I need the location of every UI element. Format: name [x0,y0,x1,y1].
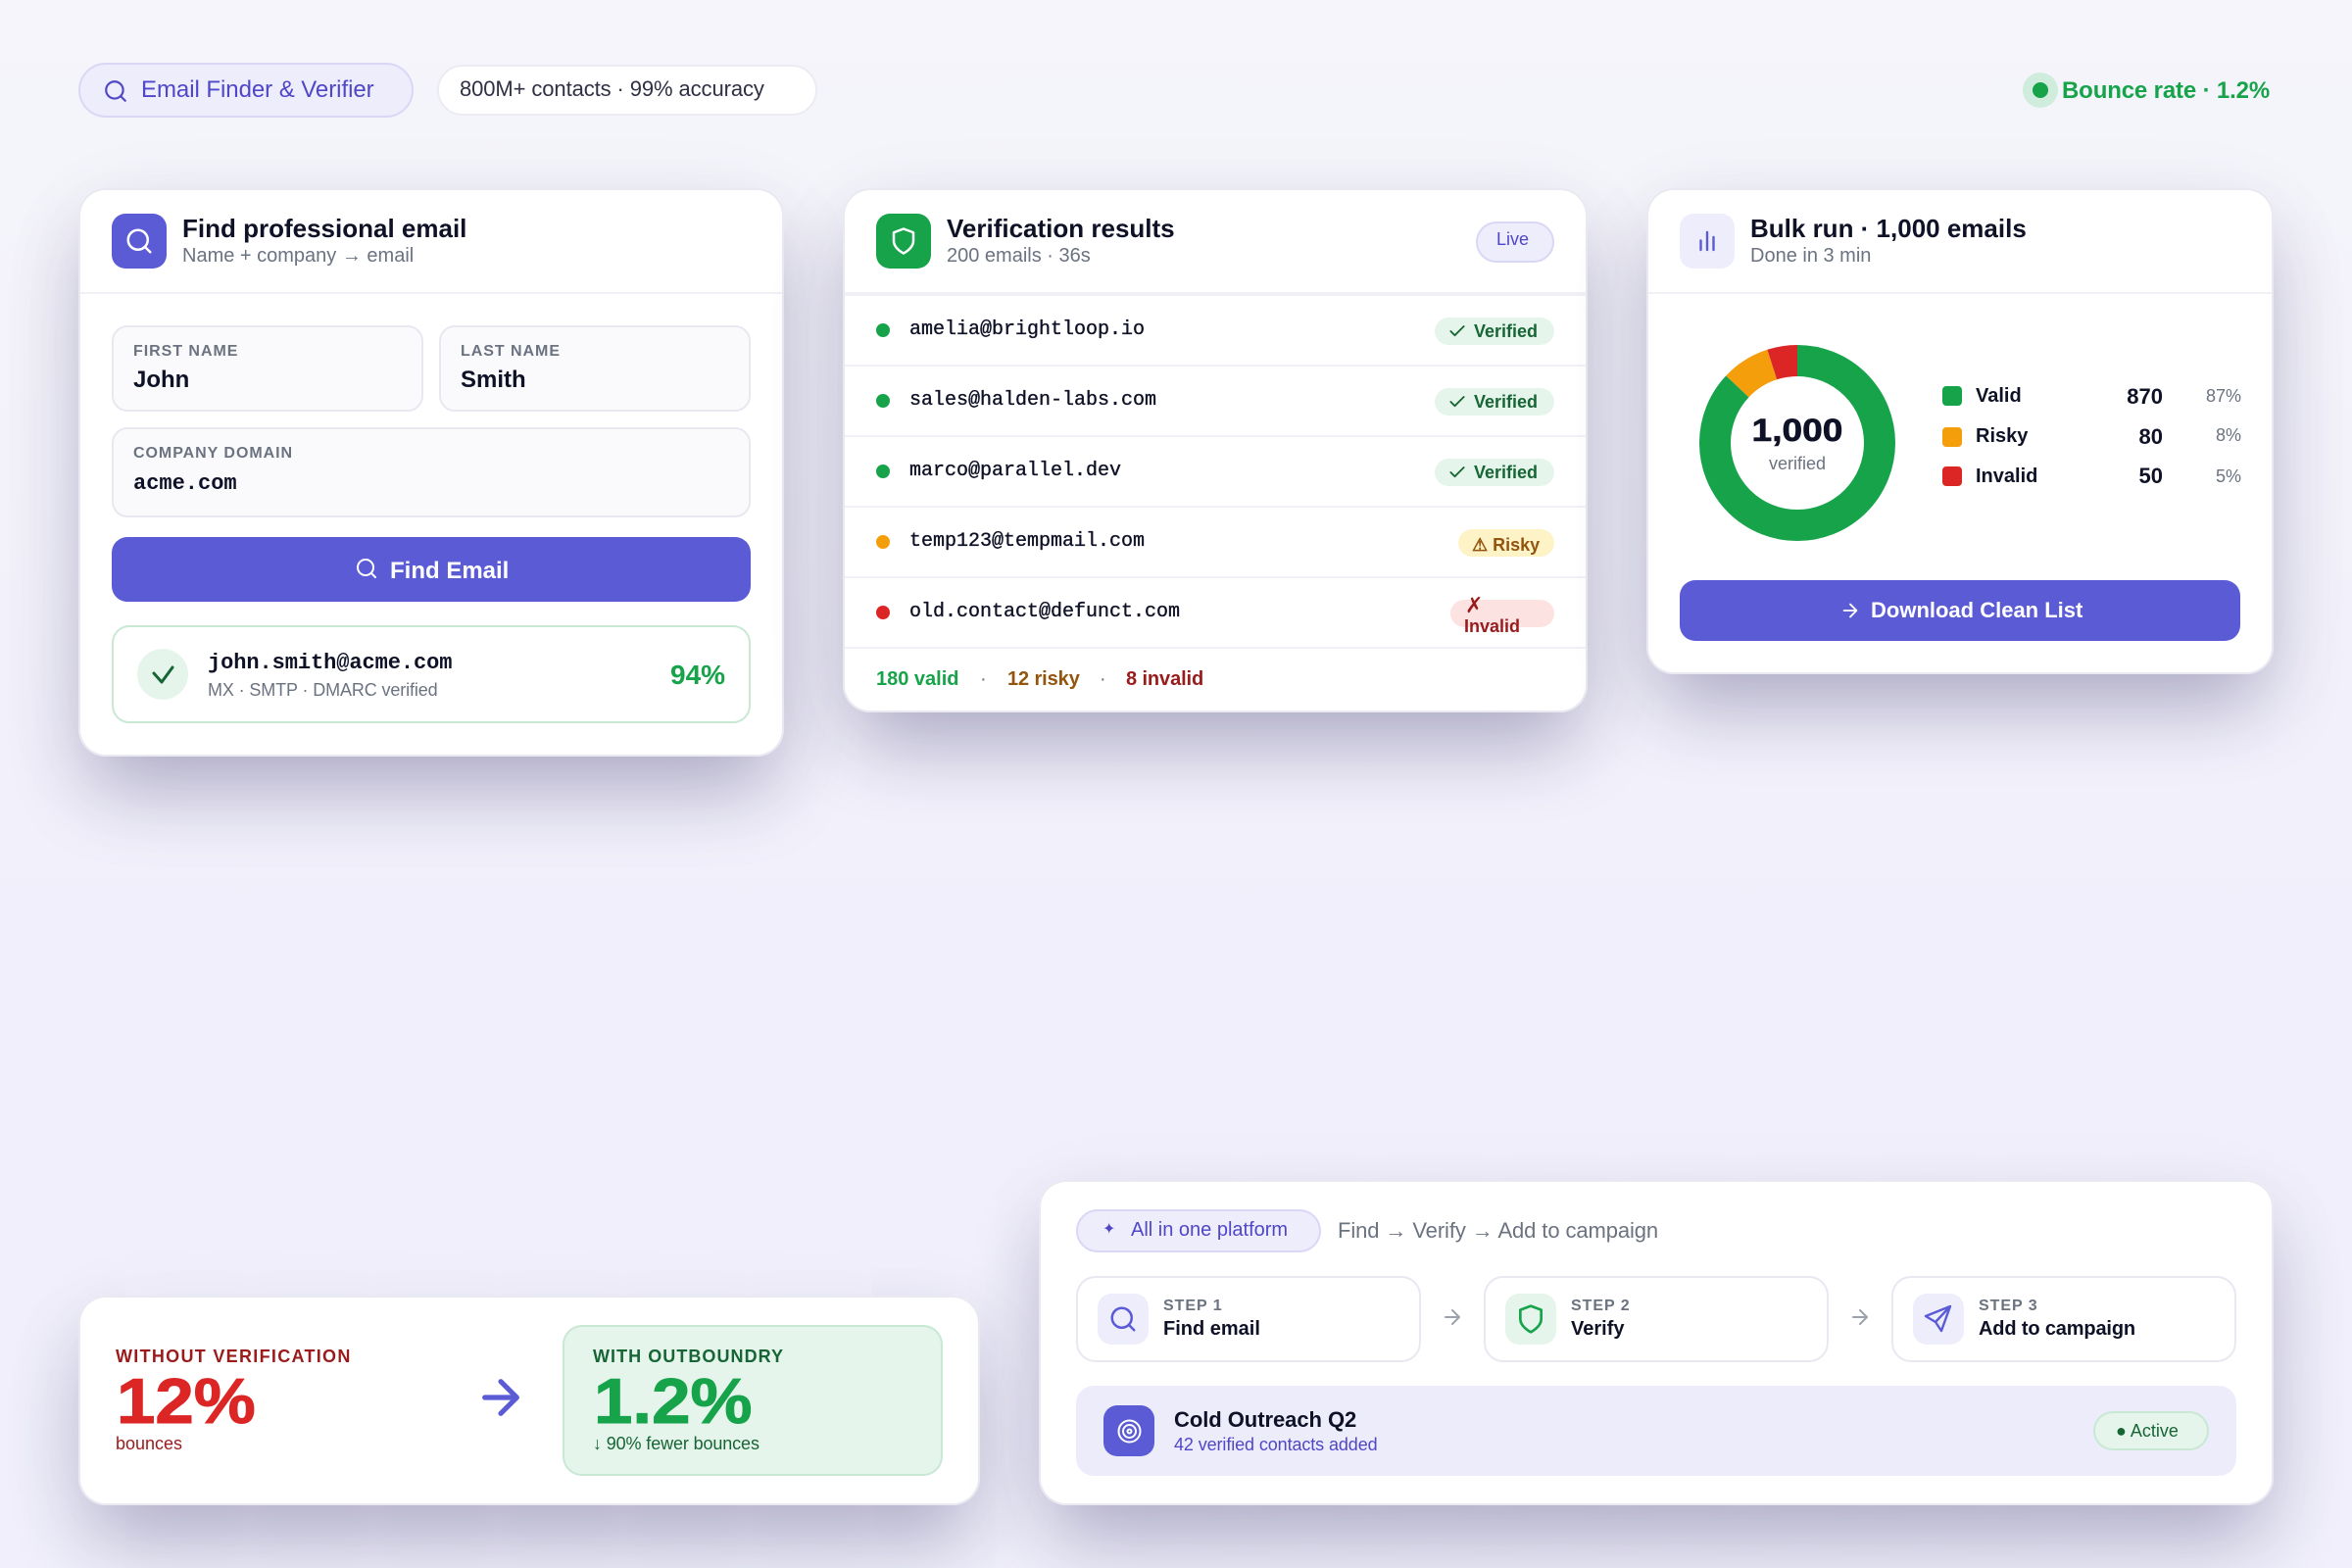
label: WITH OUTBOUNDRY [593,1347,784,1366]
step 2 [1484,1276,1829,1362]
email address: john.smith@acme.com [208,651,452,675]
invalid count: 8 invalid [1126,668,1203,690]
step name: Verify [1571,1318,1624,1340]
panel: find professional email [78,188,784,757]
arrow [1445,1309,1460,1325]
header chip: Email Finder & Verifier [78,63,414,118]
value: 1.2% [594,1365,752,1437]
step label: STEP 3 [1979,1298,2038,1314]
header chip: contacts and accuracy [437,65,817,116]
with outboundry [563,1325,943,1476]
confidence score: 94% [670,660,725,690]
donut total: 1,000 [1752,413,1842,448]
icon: sparkle: ✦ [1102,1221,1115,1238]
step label: STEP 2 [1571,1298,1631,1314]
step name: Add to campaign [1979,1318,2135,1340]
label: FIRST NAME [133,343,238,360]
icon: shield [1505,1294,1556,1345]
percent: 87% [2206,386,2241,406]
status dot [876,323,890,337]
row: old.contact [876,593,1554,636]
label: WITHOUT VERIFICATION [116,1347,352,1366]
email: marco@parallel.dev [909,460,1121,482]
chip label: Live [1496,229,1529,249]
heading: Verification results [947,214,1175,243]
row: marco [876,459,1554,486]
field: first name [112,325,423,412]
icon: arrow [1842,604,1858,617]
value: John [133,367,189,393]
badge: invalid [1450,600,1554,627]
percent: 5% [2216,466,2241,486]
valid count: 180 valid [876,668,959,690]
name: Risky [1976,425,2028,447]
panel: bounce comparison [78,1296,980,1505]
legend: risky [1942,424,2241,449]
email: sales@halden-labs.com [909,389,1156,412]
arrow [482,1379,519,1416]
donut caption: verified [1769,454,1826,473]
value: 12% [117,1365,256,1437]
status text: Bounce rate · 1.2% [2062,77,2270,104]
legend: invalid [1942,464,2241,488]
icon: search [112,214,167,269]
status dot [876,535,890,549]
without verification [116,1347,352,1453]
button label: Find Email [390,558,509,584]
pill label: ● Active [2116,1421,2179,1441]
legend: valid [1942,384,2241,409]
icon: bar chart [1680,214,1735,269]
row: temp123 [876,529,1554,557]
field: company domain [112,427,751,517]
swatch [1942,386,1962,406]
badge: verified [1435,459,1554,486]
percent: 8% [2216,425,2241,445]
icon: search [357,559,376,578]
check mark [1449,325,1465,337]
status dot [2023,73,2058,108]
email: amelia@brightloop.io [909,318,1145,341]
result: found email [112,625,751,723]
icon: search [105,80,126,102]
badge: risky [1458,529,1554,557]
email: temp123@tempmail.com [909,530,1145,553]
button label: Download Clean List [1871,598,2082,622]
heading: Bulk run · 1,000 emails [1750,214,2027,243]
icon: send [1913,1294,1964,1345]
separator: · [1100,668,1106,690]
donut chart [1699,345,1895,541]
icon: check [137,649,188,700]
button: find email [112,537,751,602]
status dot [876,606,890,619]
badge: risky: ⚠ Risky [1472,535,1540,555]
label: COMPANY DOMAIN [133,445,293,462]
subheading: 200 emails · 36s [947,245,1091,267]
name: Valid [1976,385,2022,407]
icon: target [1103,1405,1154,1456]
chip text: 800M+ contacts · 99% accuracy [460,76,764,101]
badge label: Verified [1474,463,1538,482]
subheading: Done in 3 min [1750,245,1871,267]
label: LAST NAME [461,343,561,360]
step 3 [1891,1276,2236,1362]
caption: ↓ 90% fewer bounces [593,1434,760,1453]
icon: shield [876,214,931,269]
row: amelia [876,318,1554,345]
checks: MX · SMTP · DMARC verified [208,680,438,700]
name: Invalid [1976,466,2037,487]
field: last name [439,325,751,412]
arrow [1852,1309,1868,1325]
active pill [2093,1411,2209,1450]
badge: verified [1435,388,1554,416]
flow text: Find → Verify → Add to campaign [1338,1218,1658,1243]
count: 80 [2139,424,2163,449]
badge label: Verified [1474,321,1538,341]
button: download clean list [1680,580,2240,641]
panel: verification results [843,188,1588,712]
badge: invalid: ✗ [1465,593,1483,617]
count: 50 [2139,464,2163,488]
step label: STEP 1 [1163,1298,1223,1314]
status dot [876,465,890,478]
badge: verified [1435,318,1554,345]
campaign bar [1076,1386,2236,1476]
separator: · [980,668,987,690]
swatch [1942,466,1962,486]
chip label: Email Finder & Verifier [141,76,374,103]
status dot [876,394,890,408]
check mark [1449,466,1465,478]
live chip [1476,221,1554,263]
email: old.contact@defunct.com [909,601,1180,623]
icon: search [1098,1294,1149,1345]
chip label: All in one platform [1131,1219,1288,1241]
row: sales [876,388,1554,416]
step name: Find email [1163,1318,1260,1340]
panel: bulk run [1646,188,2274,674]
badge label: Verified [1474,392,1538,412]
summary counts [876,668,1203,690]
heading: Find professional email [182,214,466,243]
campaign name: Cold Outreach Q2 [1174,1407,1356,1432]
count: 870 [2127,384,2163,409]
value: Smith [461,367,526,393]
subheading: Name + company → email [182,245,414,267]
panel: all in one platform [1039,1180,2274,1505]
caption: bounces [116,1434,182,1453]
campaign detail: 42 verified contacts added [1174,1435,1378,1454]
badge: invalid: Invalid [1464,616,1520,636]
legend [1942,384,2241,488]
value: acme.com [133,471,237,496]
check mark [1449,396,1465,408]
step 1 [1076,1276,1421,1362]
risky count: 12 risky [1007,668,1080,690]
status: bounce rate [2023,73,2270,108]
platform chip [1076,1209,1321,1252]
swatch [1942,427,1962,447]
